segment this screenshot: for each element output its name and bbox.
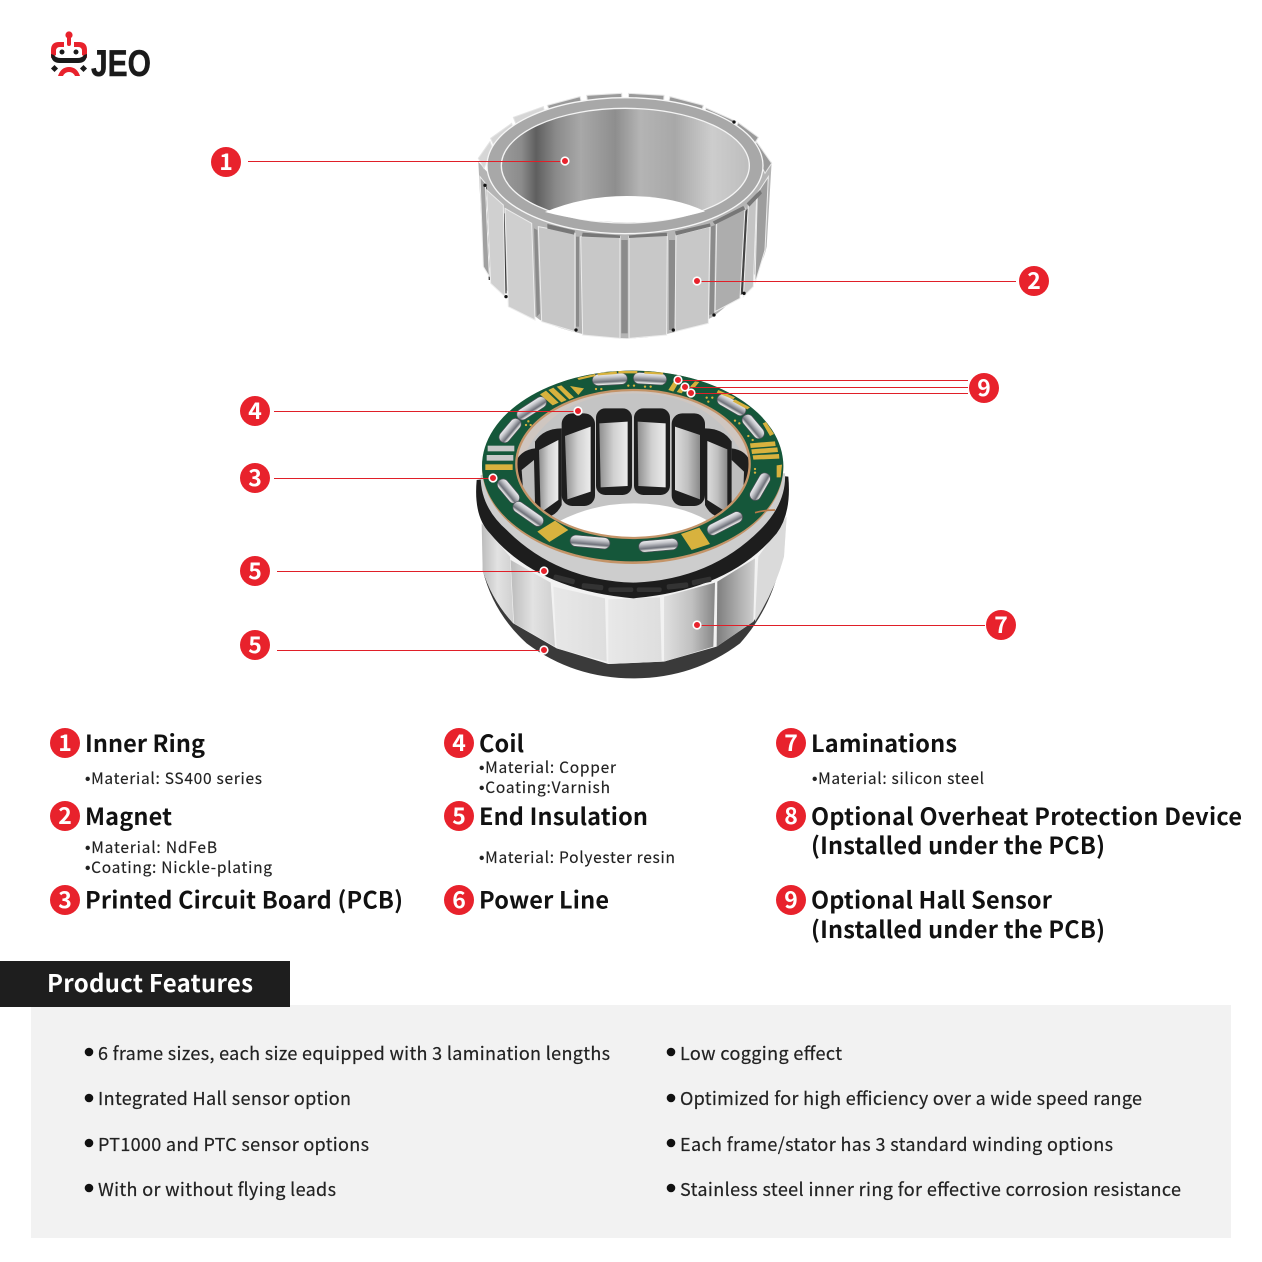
insulation ring below PCB — [481, 460, 785, 583]
leader line 5 upper — [277, 567, 548, 575]
PCB inner copper rim — [516, 390, 750, 538]
solder pads — [495, 372, 772, 553]
leader line 4 — [274, 407, 582, 415]
logo: JEO — [51, 31, 151, 84]
PCB opening — [518, 391, 748, 537]
opening — [558, 503, 707, 540]
coil windings — [517, 408, 749, 517]
callout badge 5 upper: 5 — [248, 552, 262, 586]
lamination backing — [482, 517, 787, 664]
features right column: Low cogging effect — [680, 1040, 842, 1066]
magnet slots on top face — [547, 190, 762, 238]
legend item 8: overheat protection: (Installed under the PCB) — [811, 827, 1105, 861]
legend item 1: inner ring: 1 — [58, 724, 72, 758]
legend item 9: hall sensor: 9 — [784, 881, 798, 915]
legend item 4: coil — [444, 724, 617, 798]
legend item 2: magnet: Magnet — [85, 798, 172, 832]
features left column: Integrated Hall sensor option — [98, 1085, 351, 1111]
stator teeth — [522, 460, 535, 503]
legend item 8: overheat protection: 8 — [784, 797, 798, 831]
legend item 7: laminations: •Material: silicon steel — [812, 767, 984, 789]
legend item 1: inner ring — [50, 724, 262, 789]
callout badge 4: 4 — [248, 392, 262, 426]
PCB copper edge — [482, 371, 783, 564]
callout badge 9: 9 — [977, 369, 991, 403]
legend item 9: hall sensor: Optional Hall Sensor — [811, 882, 1053, 916]
illustration: inner ring and magnets — [478, 93, 772, 338]
see-through opening — [545, 196, 705, 222]
callout badge 5 lower — [240, 626, 270, 660]
legend item 4: coil: •Coating:Varnish — [479, 776, 610, 798]
legend item 6: power line: 6 — [452, 881, 466, 915]
features right column: Optimized for high efficiency over a wide speed range — [680, 1085, 1142, 1111]
legend item 2: magnet — [50, 797, 272, 878]
features left column: PT1000 and PTC sensor options — [98, 1131, 369, 1157]
features left column: With or without flying leads — [98, 1176, 336, 1202]
callout badge 7: 7 — [994, 606, 1008, 640]
callout badge 3: 3 — [248, 459, 262, 493]
icon: robot mark — [51, 31, 87, 76]
upper end insulation — [476, 460, 789, 598]
legend item 1: inner ring: Inner Ring — [85, 725, 205, 759]
callout badge 1 — [211, 143, 241, 177]
PCB ring — [482, 371, 783, 561]
legend item 5: end insulation: End Insulation — [479, 798, 648, 832]
features right column: Stainless steel inner ring for effective corrosion resistance — [680, 1176, 1181, 1202]
features right column: Each frame/stator has 3 standard winding options — [680, 1131, 1113, 1157]
features left column: 6 frame sizes, each size equipped with 3 lamination lengths — [98, 1040, 610, 1066]
legend item 8: overheat protection: Optional Overheat Protection Device — [811, 798, 1242, 832]
legend item 5: end insulation: •Material: Polyester resin — [479, 846, 675, 868]
legend item 5: end insulation: 5 — [452, 797, 466, 831]
small black notches — [483, 120, 746, 332]
magnet bars, front — [480, 177, 768, 338]
leader line 1 — [248, 157, 569, 165]
power line solder — [755, 510, 775, 513]
heading bar — [0, 961, 290, 1007]
callout badge 2 — [1019, 262, 1049, 296]
legend item 4: coil: •Material: Copper — [479, 756, 617, 778]
outer body of rotor — [478, 162, 772, 338]
legend item 4: coil: Coil — [479, 725, 524, 759]
legend item 5: end insulation — [444, 797, 675, 868]
callout badge 1: 1 — [219, 143, 233, 177]
callout badge 2: 2 — [1027, 262, 1041, 296]
features right column — [667, 1040, 1181, 1202]
gap stripes between magnets — [485, 187, 748, 333]
legend item 7: laminations — [776, 724, 984, 789]
illustration: stator, PCB and coils — [476, 371, 789, 678]
ring top face — [487, 98, 763, 234]
callout badge 5 lower: 5 — [248, 626, 262, 660]
callout badge 4 — [240, 392, 270, 426]
inner wall — [501, 108, 749, 223]
bottom end insulation — [483, 540, 780, 678]
callout badge 5 upper — [240, 552, 270, 586]
legend item 9: hall sensor: (Installed under the PCB) — [811, 911, 1105, 945]
legend item 1: inner ring: •Material: SS400 series — [85, 767, 262, 789]
heading bar: Product Features — [47, 964, 253, 999]
legend item 9: hall sensor — [776, 881, 1105, 945]
gold contacts — [485, 371, 782, 550]
legend item 7: laminations: Laminations — [811, 725, 957, 759]
legend item 7: laminations: 7 — [784, 724, 798, 758]
callout badge 9 — [969, 369, 999, 403]
features left column — [85, 1040, 610, 1202]
lamination segments — [482, 517, 787, 664]
legend item 2: magnet: •Coating: Nickle-plating — [85, 856, 272, 878]
legend item 8: overheat protection — [776, 797, 1242, 861]
leader line 5 lower — [277, 646, 548, 654]
legend item 2: magnet: •Material: NdFeB — [85, 836, 217, 858]
coil back wall — [518, 392, 748, 457]
leader lines 9 — [674, 376, 968, 397]
wordmark: JEO — [91, 43, 151, 84]
legend item 3: PCB: 3 — [58, 881, 72, 915]
legend item 3: PCB: Printed Circuit Board (PCB) — [85, 882, 403, 916]
legend item 6: power line: Power Line — [479, 882, 609, 916]
leader line 7 — [693, 621, 985, 629]
callout badge 7 — [986, 606, 1016, 640]
leader line 2 — [693, 277, 1016, 285]
end insulation block highlights — [553, 574, 712, 592]
leader line 3 — [274, 474, 497, 482]
legend item 2: magnet: 2 — [58, 797, 72, 831]
callout badge 3 — [240, 459, 270, 493]
legend item 4: coil: 4 — [452, 724, 466, 758]
panel: product features — [0, 961, 1231, 1238]
magnet tops at rear — [478, 93, 772, 173]
silver contacts — [487, 446, 514, 461]
